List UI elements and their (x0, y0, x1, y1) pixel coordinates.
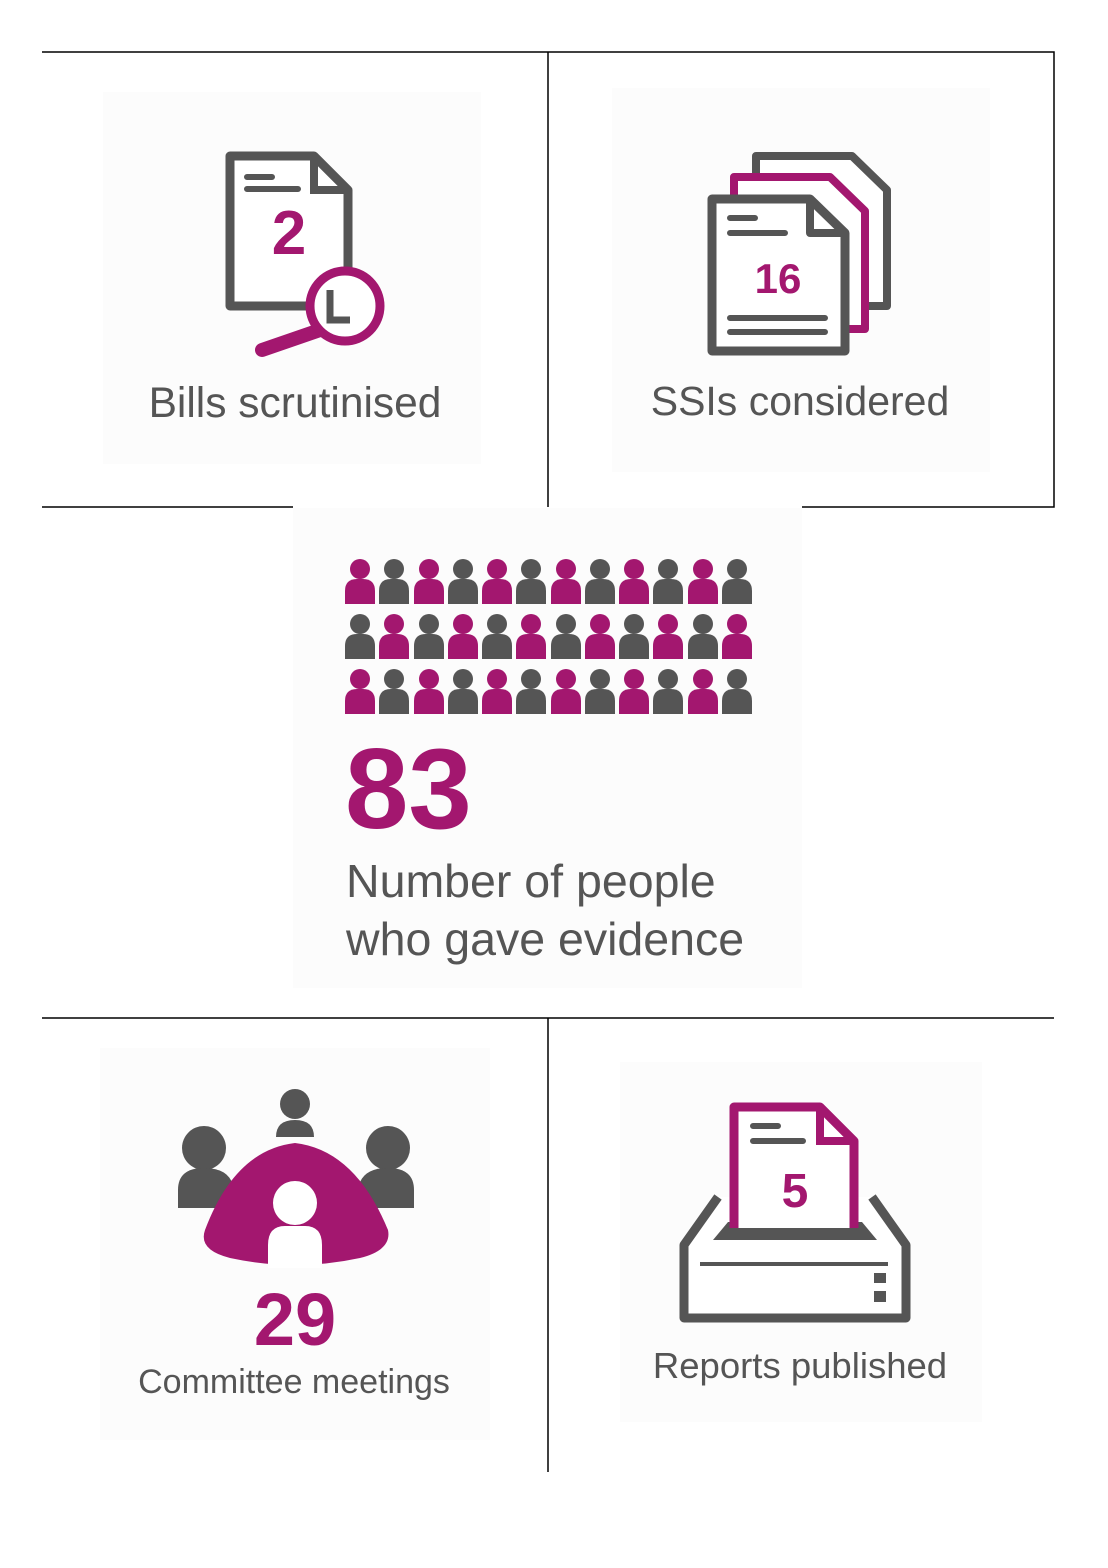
label: SSIs considered (651, 378, 949, 424)
label: Bills scrutinised (149, 380, 441, 427)
icon: printer with report (684, 1107, 906, 1318)
icon: people grid (345, 559, 752, 714)
icon: meeting table (178, 1089, 414, 1268)
panel: bills scrutinised (149, 156, 441, 427)
label: Committee meetings (138, 1363, 450, 1401)
icon: printer with report: 5 (782, 1165, 808, 1218)
label: Number of people (346, 855, 716, 907)
number 29: 29 (254, 1278, 336, 1361)
panel: SSIs considered (651, 156, 949, 424)
icon: document with magnifier: 2 (272, 199, 306, 268)
panel: committee meetings (138, 1089, 450, 1401)
number 83: 83 (345, 726, 472, 853)
panel: reports published (653, 1107, 947, 1386)
icon: document with magnifier (230, 156, 380, 350)
icon: stacked documents: 16 (755, 255, 801, 302)
label: Reports published (653, 1345, 947, 1386)
label: who gave evidence (345, 913, 744, 965)
icon: stacked documents (712, 156, 887, 351)
panel: people who gave evidence (345, 559, 752, 965)
panel backgrounds (100, 88, 990, 1440)
